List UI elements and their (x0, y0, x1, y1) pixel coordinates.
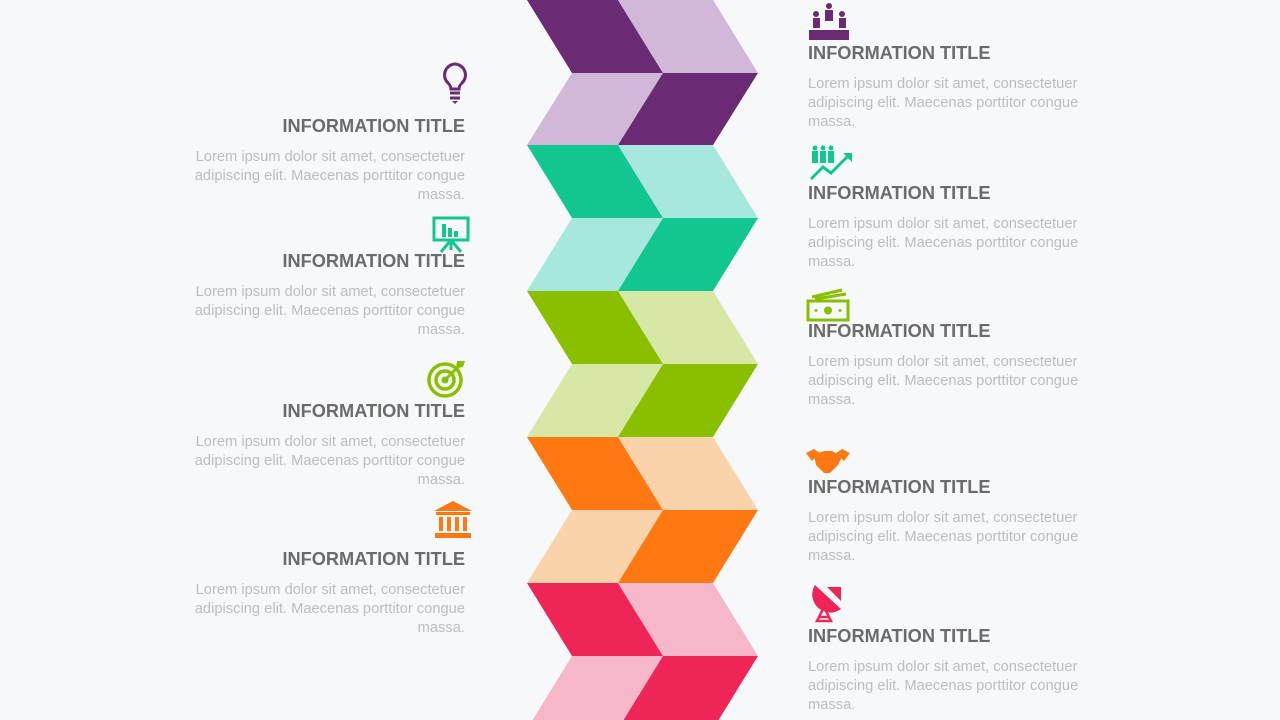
left block 4: Lorem ipsum dolor sit amet, consectetuer adipiscing elit. Maecenas porttitor congue massa. (195, 582, 465, 636)
right block 2 (808, 183, 1078, 270)
left block 3 (195, 401, 465, 488)
icon: bank (434, 501, 472, 538)
left block 1 (195, 116, 465, 203)
right block 3 (808, 321, 1078, 408)
left block 1: Lorem ipsum dolor sit amet, consectetuer adipiscing elit. Maecenas porttitor congue massa. (195, 149, 465, 203)
icon: handshake (806, 449, 850, 473)
right block 1 (808, 43, 1078, 130)
left block 2: INFORMATION TITLE (282, 251, 465, 271)
icon: podium (809, 3, 849, 40)
right block 2: INFORMATION TITLE (808, 183, 991, 203)
left block 4: INFORMATION TITLE (282, 549, 465, 569)
icon: money (806, 288, 850, 322)
left block 1: INFORMATION TITLE (282, 116, 465, 136)
right block 5: INFORMATION TITLE (808, 626, 991, 646)
left block 3: INFORMATION TITLE (282, 401, 465, 421)
left block 2 (195, 251, 465, 338)
right block 3: Lorem ipsum dolor sit amet, consectetuer adipiscing elit. Maecenas porttitor congue massa. (808, 354, 1078, 408)
right block 4 (808, 477, 1078, 564)
icon: team growth (810, 146, 852, 180)
right block 5 (808, 626, 1078, 713)
right block 2: Lorem ipsum dolor sit amet, consectetuer adipiscing elit. Maecenas porttitor congue massa. (808, 216, 1078, 270)
right block 3: INFORMATION TITLE (808, 321, 991, 341)
right block 4: INFORMATION TITLE (808, 477, 991, 497)
left block 2: Lorem ipsum dolor sit amet, consectetuer adipiscing elit. Maecenas porttitor congue massa. (195, 284, 465, 338)
right block 5: Lorem ipsum dolor sit amet, consectetuer adipiscing elit. Maecenas porttitor congue massa. (808, 659, 1078, 713)
left block 4 (195, 549, 465, 636)
icon: target (427, 361, 465, 398)
left block 3: Lorem ipsum dolor sit amet, consectetuer adipiscing elit. Maecenas porttitor congue massa. (195, 434, 465, 488)
right block 4: Lorem ipsum dolor sit amet, consectetuer adipiscing elit. Maecenas porttitor congue massa. (808, 510, 1078, 564)
right block 1: INFORMATION TITLE (808, 43, 991, 63)
icon: presentation board (432, 216, 470, 253)
icon: satellite dish (812, 585, 841, 622)
right block 1: Lorem ipsum dolor sit amet, consectetuer adipiscing elit. Maecenas porttitor congue massa. (808, 76, 1078, 130)
icon: lightbulb (443, 62, 467, 104)
